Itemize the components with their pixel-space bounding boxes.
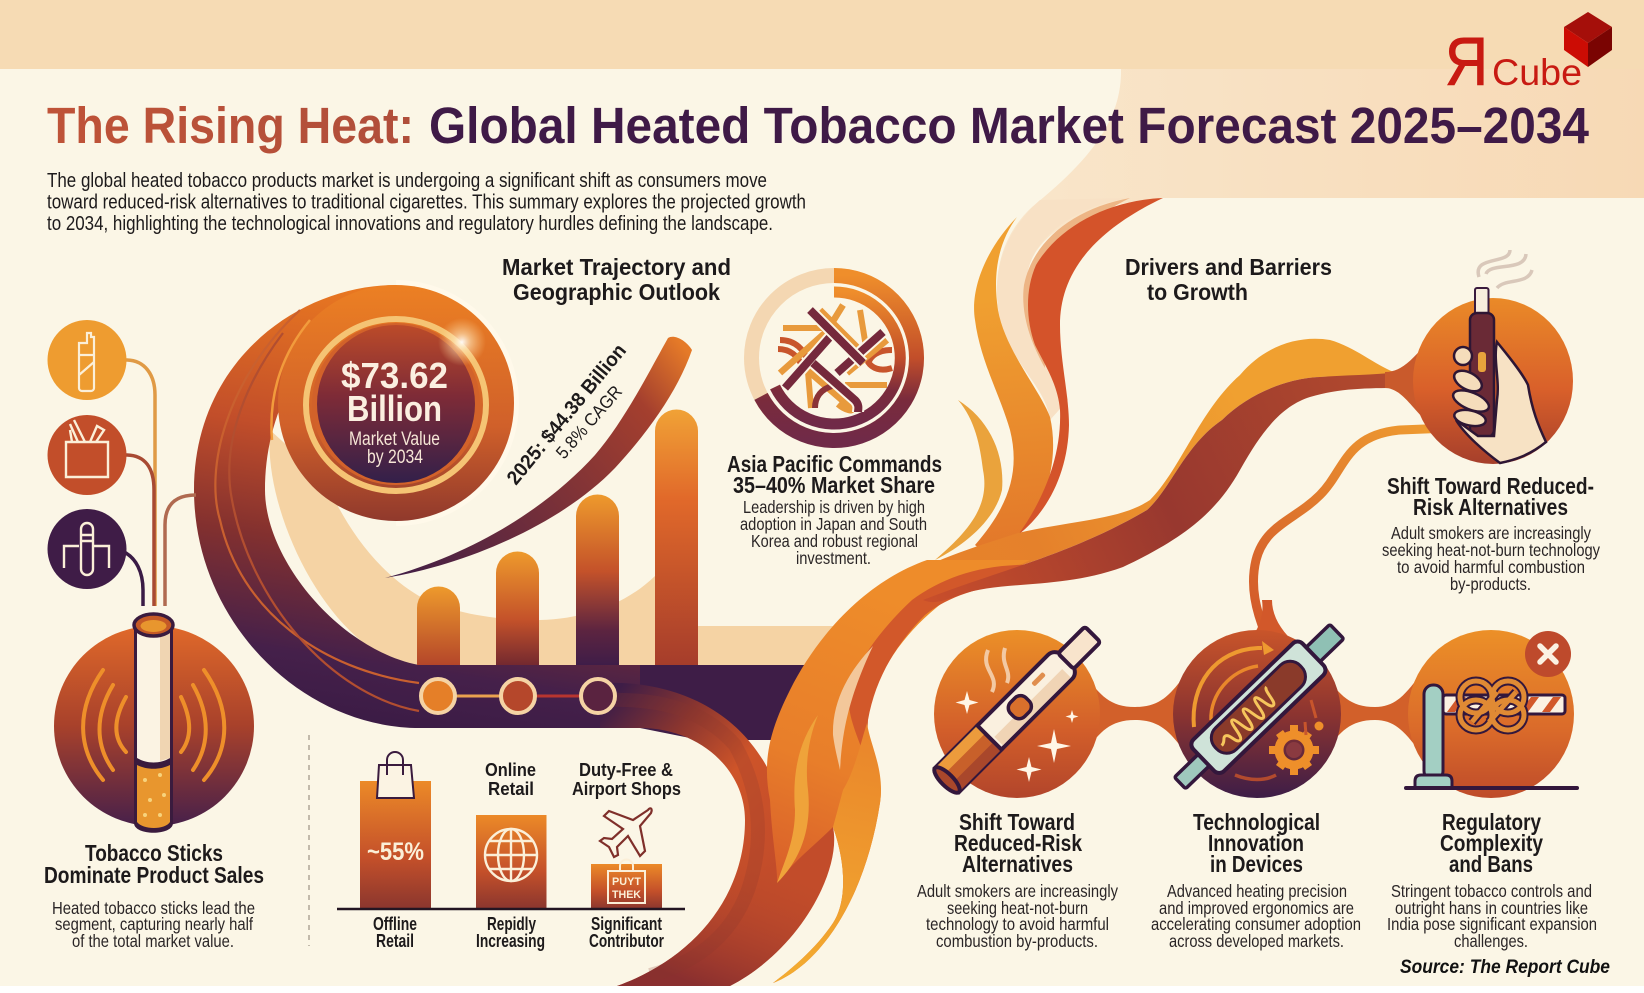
icon: globe xyxy=(485,829,537,881)
tobacco sticks text: Heated tobacco sticks lead the xyxy=(52,898,255,918)
lower band sweep xyxy=(600,683,834,986)
column text: regulatory complexity: India pose significant expansion xyxy=(1387,914,1597,934)
trend labels: 5.8% CAGR xyxy=(552,382,626,463)
ribbon thin lines xyxy=(215,310,419,711)
value circle: Billion xyxy=(347,388,442,429)
logo: RCube: Я xyxy=(1445,24,1488,100)
logo: RCube: Cube xyxy=(1492,52,1582,93)
yellow tail flame xyxy=(773,723,881,983)
timeline dots xyxy=(421,679,615,713)
column text: technological innovation xyxy=(1151,809,1361,951)
top right text: to avoid harmful combustion xyxy=(1397,557,1585,577)
yellow inner wisp xyxy=(777,715,818,883)
smoke xyxy=(1478,250,1532,288)
retail labels: Retail xyxy=(488,779,534,799)
column text: regulatory complexity: challenges. xyxy=(1454,931,1528,951)
peach inner swoosh xyxy=(269,430,855,665)
column text: shift toward reduced-risk: Adult smokers are increasingly xyxy=(917,881,1118,901)
retail labels: Offline xyxy=(373,914,417,934)
retail bar chart: ~55% xyxy=(367,838,424,866)
value circle: Market Value xyxy=(349,429,440,450)
heading: market trajectory: Market Trajectory and xyxy=(502,254,731,280)
device xyxy=(1475,288,1488,314)
top right text: Risk Alternatives xyxy=(1413,494,1568,520)
icon: stick pack on red circle xyxy=(48,415,126,495)
column text: shift toward reduced-risk: combustion by-products. xyxy=(936,931,1098,951)
top right text: Adult smokers are increasingly xyxy=(1391,523,1591,543)
intro paragraph xyxy=(47,169,806,235)
darker peach tongue xyxy=(1023,198,1130,368)
column text: technological innovation: Technological xyxy=(1193,809,1320,835)
value circle xyxy=(271,280,519,526)
tobacco sticks text xyxy=(44,840,264,951)
band flare into circle xyxy=(1385,345,1425,420)
retail labels: Significant xyxy=(591,914,662,934)
column text: technological innovation: and improved ergonomics are xyxy=(1159,898,1354,918)
icon: shopping bag xyxy=(377,752,414,798)
source note: Source: The Report Cube xyxy=(1400,957,1610,978)
heading: drivers and barriers: Drivers and Barriers xyxy=(1125,254,1332,280)
light peach wisp xyxy=(997,198,1130,420)
asia pacific text: Leadership is driven by high xyxy=(743,497,925,517)
asia pacific text: 35–40% Market Share xyxy=(733,472,935,498)
retail bar chart xyxy=(337,752,685,909)
retail labels: Online xyxy=(485,760,536,780)
column text: regulatory complexity: Complexity xyxy=(1440,830,1543,856)
icon: duty free bag: PUYT xyxy=(612,876,641,888)
heading: market trajectory xyxy=(502,254,731,305)
trend swoosh xyxy=(385,337,692,578)
column text: technological innovation: in Devices xyxy=(1210,851,1303,877)
column text: shift toward reduced-risk: Shift Toward xyxy=(959,809,1075,835)
column text: shift toward reduced-risk: seeking heat-not-burn xyxy=(947,898,1088,918)
asia pacific text xyxy=(727,451,942,568)
maroon band to top right circle xyxy=(923,372,1400,602)
red flame xyxy=(1018,198,1163,535)
heading: drivers and barriers xyxy=(1125,254,1332,305)
column text: regulatory complexity xyxy=(1387,809,1597,951)
knot xyxy=(1460,681,1524,730)
icon: device on amber circle xyxy=(48,320,126,400)
tobacco sticks text: segment, capturing nearly half xyxy=(55,914,253,934)
peach header panel with flame edge xyxy=(997,69,1644,373)
trend labels: 2025: $44.38 Billion xyxy=(503,340,631,489)
asia pacific text: investment. xyxy=(796,548,871,568)
tobacco sticks text: of the total market value. xyxy=(72,931,234,951)
retail labels: Repidly xyxy=(487,914,536,934)
retail labels: Duty-Free & xyxy=(579,760,673,780)
intro paragraph: The global heated tobacco products market is undergoing a significant shift as consumers move xyxy=(47,169,767,192)
intro paragraph: toward reduced-risk alternatives to traditional cigarettes. This summary explores the projected growth xyxy=(47,190,806,214)
value circle: $73.62 xyxy=(341,355,448,396)
red wrap band xyxy=(849,565,1070,760)
left icon connectors xyxy=(124,360,196,606)
asia pacific text: Asia Pacific Commands xyxy=(727,451,942,477)
column text: technological innovation: Innovation xyxy=(1208,830,1304,856)
column text: shift toward reduced-risk xyxy=(917,809,1118,951)
circle: hand holding device xyxy=(1413,250,1573,464)
retail labels xyxy=(373,760,681,951)
retail labels: Increasing xyxy=(476,931,545,951)
circle: heating device with gear xyxy=(1165,616,1352,799)
tobacco stick illustration xyxy=(54,614,254,833)
main orange flame body xyxy=(767,560,1030,983)
logo: RCube xyxy=(1445,12,1612,100)
top right text xyxy=(1382,473,1600,594)
column text: regulatory complexity: Stringent tobacco controls and xyxy=(1391,881,1592,901)
top right text: seeking heat-not-burn technology xyxy=(1382,540,1600,560)
column text: shift toward reduced-risk: Reduced-Risk xyxy=(954,830,1083,856)
column text: regulatory complexity: and Bans xyxy=(1449,851,1533,877)
main swoosh ribbon xyxy=(194,285,660,728)
tobacco sticks text: Tobacco Sticks xyxy=(85,840,223,866)
bar chart xyxy=(417,410,698,665)
retail labels: Contributor xyxy=(589,931,664,951)
column text: shift toward reduced-risk: technology to avoid harmful xyxy=(926,914,1109,934)
column text: regulatory complexity: outright hans in countries like xyxy=(1395,898,1588,918)
top right text: Shift Toward Reduced- xyxy=(1387,473,1594,499)
heading: drivers and barriers: to Growth xyxy=(1147,279,1248,305)
striped barrier arm xyxy=(1443,695,1565,714)
column text: technological innovation: Advanced heating precision xyxy=(1167,881,1347,901)
fingers xyxy=(1450,347,1492,429)
bottom circles connectors xyxy=(1085,675,1420,752)
asia pacific ring emblem xyxy=(752,275,917,440)
orange band to top right circle xyxy=(867,339,1400,600)
top right connector line xyxy=(1248,428,1450,644)
heading: market trajectory: Geographic Outlook xyxy=(513,279,721,305)
intro paragraph: to 2034, highlighting the technological innovations and regulatory hurdles defining the landscape. xyxy=(47,212,773,235)
small side flame xyxy=(935,400,1002,560)
circle: device with sparkles xyxy=(931,622,1105,798)
top header band xyxy=(0,0,1644,69)
top right text: by-products. xyxy=(1450,574,1531,594)
icon: duty free bag xyxy=(608,860,645,903)
asia pacific text: Korea and robust regional xyxy=(751,531,918,551)
icon: duty free bag: THEK xyxy=(612,889,641,901)
tobacco sticks text: Dominate Product Sales xyxy=(44,862,264,888)
circle: regulatory barrier xyxy=(1406,630,1577,798)
central flames xyxy=(767,198,1425,983)
hand palm xyxy=(1456,342,1546,463)
title: Global Heated Tobacco Market Forecast 2025–2034 xyxy=(429,97,1590,154)
woven knot xyxy=(778,305,892,412)
column text: technological innovation: accelerating consumer adoption xyxy=(1151,914,1361,934)
title: The Rising Heat: xyxy=(47,97,414,154)
column text: regulatory complexity: Regulatory xyxy=(1442,809,1541,835)
icon: plane xyxy=(600,808,652,857)
orange flame xyxy=(974,217,1053,565)
value circle: by 2034 xyxy=(367,447,423,468)
dark ribbon continuation xyxy=(640,665,830,740)
column text: technological innovation: across developed markets. xyxy=(1169,931,1344,951)
icon: heating stick on dark circle xyxy=(48,509,126,589)
asia pacific text: adoption in Japan and South xyxy=(740,514,927,534)
retail labels: Airport Shops xyxy=(572,779,681,799)
pale wisp xyxy=(833,646,873,770)
retail labels: Retail xyxy=(376,931,414,951)
column text: shift toward reduced-risk: Alternatives xyxy=(962,851,1073,877)
